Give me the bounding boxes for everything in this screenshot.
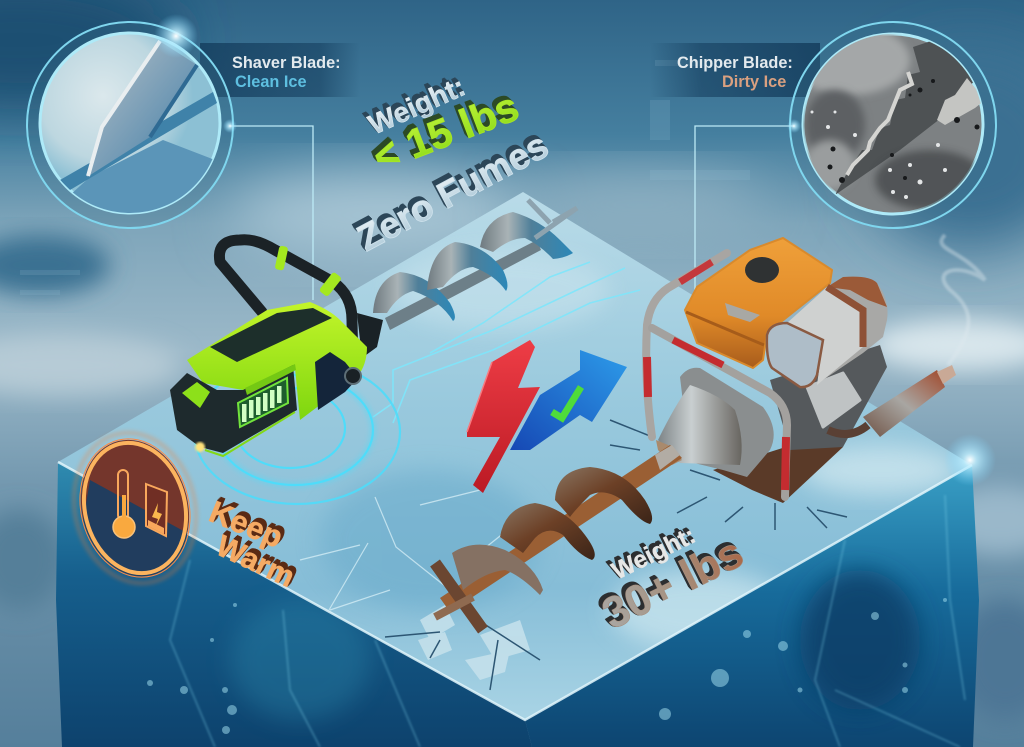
collar bbox=[357, 313, 383, 358]
heading: weight under 15 lbs: < 15 lbs bbox=[367, 83, 525, 180]
icon: lightning bolt and check arrow bbox=[467, 340, 627, 493]
fuel tank bbox=[685, 238, 832, 368]
shaver label: Clean Ice bbox=[235, 73, 306, 91]
heading: weight under 15 lbs: Weight: bbox=[364, 71, 470, 140]
auger shaft and flights bbox=[435, 445, 682, 630]
flare bbox=[154, 14, 198, 58]
battery pack bbox=[170, 365, 297, 453]
ice block bbox=[56, 192, 979, 747]
chipper label bbox=[650, 43, 820, 97]
callout: chipper blade bbox=[650, 22, 996, 290]
smoke bbox=[941, 235, 985, 365]
starter box bbox=[807, 373, 860, 427]
heading: keep warm bbox=[204, 494, 300, 594]
chipper lens bbox=[790, 22, 996, 228]
connector line bbox=[695, 119, 801, 290]
callout: shaver blade bbox=[27, 14, 360, 300]
shaver label bbox=[200, 43, 360, 97]
icon: keep warm bbox=[70, 429, 200, 588]
heading: zero fumes: Zero Fumes bbox=[351, 124, 555, 259]
ice top face bbox=[58, 192, 972, 720]
auger shaft and flights bbox=[373, 200, 577, 330]
chipper label: Chipper Blade: bbox=[677, 54, 793, 72]
cracks in ice bbox=[385, 420, 847, 690]
motor rear housing bbox=[315, 352, 358, 410]
cylinder bbox=[767, 277, 888, 387]
blade lens bbox=[27, 22, 233, 228]
ice right side face bbox=[525, 465, 979, 747]
ice shards under gas auger tip bbox=[418, 605, 530, 680]
motor body bbox=[187, 302, 367, 420]
heading: keep warm: Warm bbox=[211, 529, 300, 594]
chipper label: Dirty Ice bbox=[722, 73, 786, 91]
engine block bbox=[770, 345, 887, 450]
base plate bbox=[713, 433, 843, 503]
battery indicator bbox=[238, 378, 288, 427]
exhaust bbox=[828, 365, 956, 437]
rear roll frame bbox=[646, 253, 727, 437]
heading: keep warm: Keep bbox=[204, 494, 288, 555]
heading: weight 30+ lbs: Weight: bbox=[608, 522, 700, 585]
handle grips bbox=[275, 245, 342, 297]
connector line bbox=[223, 119, 313, 300]
corner flare bbox=[944, 434, 996, 486]
drive housing and cone bbox=[656, 368, 774, 477]
ice left side face bbox=[56, 462, 532, 747]
front roll frame bbox=[652, 328, 787, 497]
handle bbox=[219, 240, 353, 373]
shaver label: Shaver Blade: bbox=[232, 54, 341, 72]
heading: weight 30+ lbs: 30+ lbs bbox=[595, 528, 751, 639]
sound rings bbox=[194, 360, 400, 504]
electric auger bbox=[170, 200, 577, 504]
glowing circuit lines bbox=[373, 262, 640, 423]
gas auger bbox=[435, 235, 985, 630]
